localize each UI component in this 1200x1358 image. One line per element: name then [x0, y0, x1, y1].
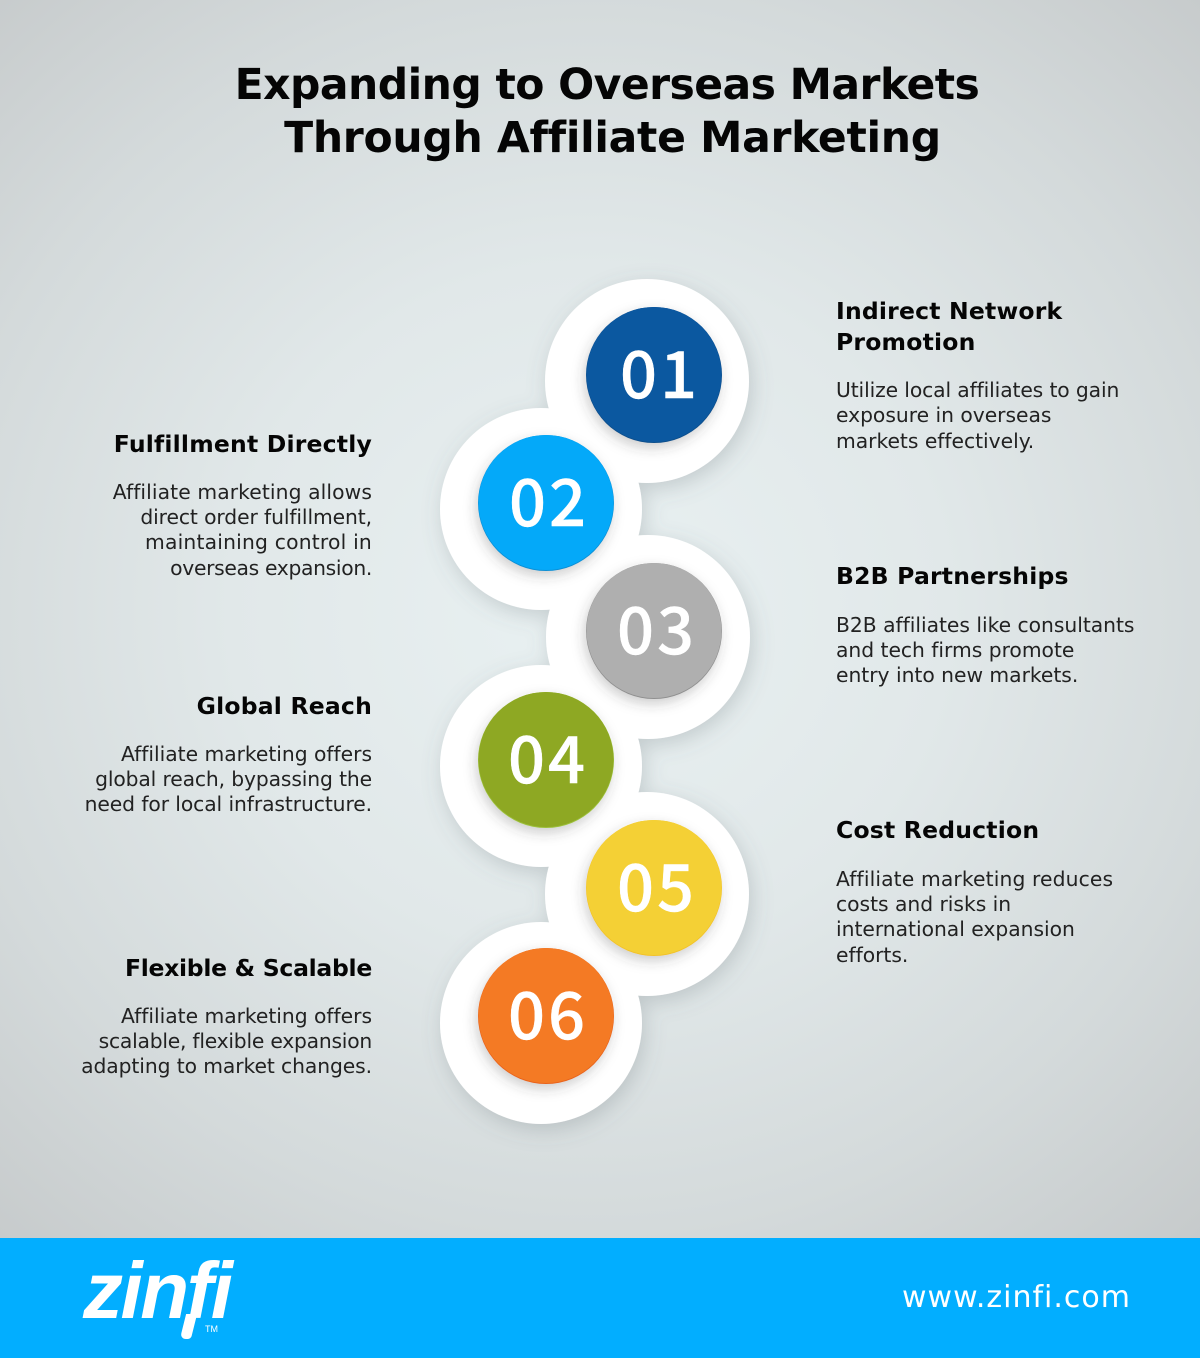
logo: zinfi: zinfi [83, 1246, 230, 1335]
item 04: Global Reach [85, 692, 372, 816]
circle 03 [586, 563, 722, 699]
item 01: Indirect Network Promotion: exposure in overseas [836, 403, 1051, 427]
item 05: Cost Reduction [836, 816, 1113, 967]
item 05: Cost Reduction: Cost Reduction [836, 816, 1039, 844]
item 01: Indirect Network Promotion: Indirect Network [836, 297, 1062, 325]
item 01: Indirect Network Promotion: Utilize local affiliates to gain [836, 378, 1119, 402]
item 04: Global Reach: Affiliate marketing offers [121, 742, 372, 766]
circle 02 [478, 435, 614, 571]
item 02: Fulfillment Directly: Affiliate marketing allows [113, 480, 372, 504]
circle 04: 04 [508, 708, 588, 802]
item 04: Global Reach: global reach, bypassing the [95, 767, 372, 791]
item 03: B2B Partnerships: B2B Partnerships [836, 562, 1069, 590]
circle 02: 02 [509, 451, 589, 545]
circle 05 [586, 820, 722, 956]
item 01: Indirect Network Promotion: markets effectively. [836, 429, 1034, 453]
item 06: Flexible & Scalable [81, 954, 372, 1078]
circle 04 [478, 692, 614, 828]
item 05: Cost Reduction: efforts. [836, 943, 908, 967]
item 01: Indirect Network Promotion [836, 297, 1119, 453]
item 03: B2B Partnerships: and tech firms promote [836, 638, 1074, 662]
item 05: Cost Reduction: costs and risks in [836, 892, 1011, 916]
item 02: Fulfillment Directly: overseas expansion. [170, 556, 372, 580]
circle 01: 01 [620, 323, 700, 417]
item 02: Fulfillment Directly [113, 430, 372, 580]
circle 06: 06 [508, 964, 588, 1058]
circle 01 [586, 307, 722, 443]
item 03: B2B Partnerships [836, 562, 1134, 687]
item 06: Flexible & Scalable: adapting to market changes. [81, 1054, 372, 1078]
item 02: Fulfillment Directly: Fulfillment Directly [114, 430, 372, 458]
item 04: Global Reach: need for local infrastructure. [85, 792, 372, 816]
logo: zinfi: TM [205, 1324, 218, 1334]
item 03: B2B Partnerships: B2B affiliates like consultants [836, 612, 1134, 636]
item 01: Indirect Network Promotion: Promotion [836, 328, 976, 356]
item 06: Flexible & Scalable: scalable, flexible expansion [99, 1029, 372, 1053]
circle 03: 03 [617, 579, 697, 673]
title: Expanding to Overseas Markets [235, 61, 979, 110]
item 05: Cost Reduction: Affiliate marketing reduces [836, 866, 1113, 890]
item 03: B2B Partnerships: entry into new markets. [836, 663, 1078, 687]
item 02: Fulfillment Directly: maintaining control in [145, 530, 372, 554]
white chain backing [440, 279, 750, 1124]
title: Through Affiliate Marketing [284, 114, 941, 163]
circle 06 [478, 948, 614, 1084]
item 04: Global Reach: Global Reach [197, 692, 372, 720]
item 06: Flexible & Scalable: Flexible & Scalable [125, 954, 372, 982]
title [235, 61, 979, 163]
item 06: Flexible & Scalable: Affiliate marketing offers [121, 1004, 372, 1028]
item 02: Fulfillment Directly: direct order fulfillment, [140, 505, 372, 529]
item 05: Cost Reduction: international expansion [836, 917, 1075, 941]
footer band [0, 1238, 1200, 1358]
website url: www.zinfi.com [902, 1280, 1131, 1315]
circle 05: 05 [617, 836, 697, 930]
